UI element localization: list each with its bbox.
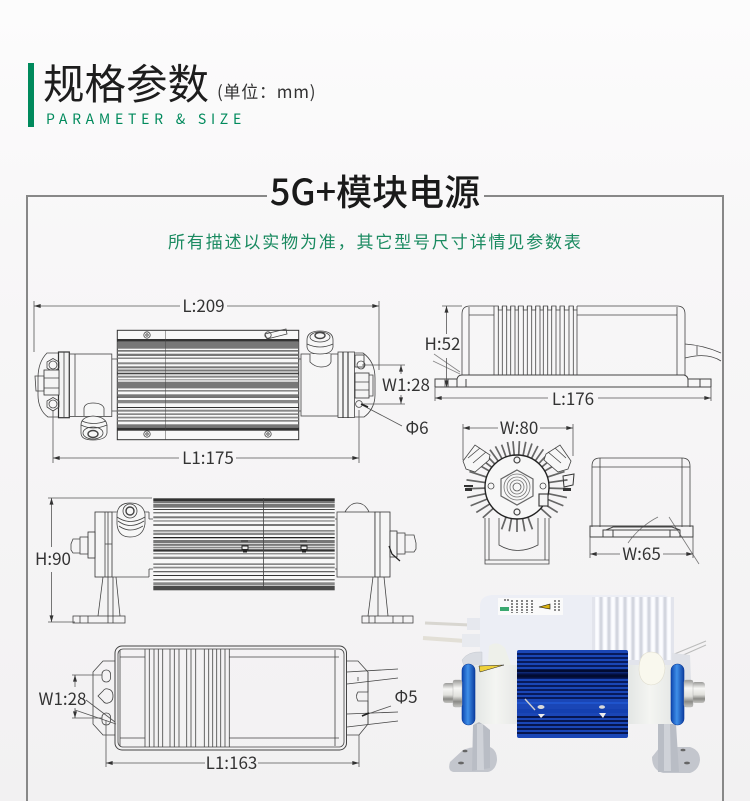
right translucent chamber <box>628 665 672 724</box>
left stand <box>449 722 497 772</box>
power supply housing <box>480 595 674 690</box>
panel heading: 5G+模块电源 <box>270 164 480 216</box>
english subtitle: PARAMETER & SIZE <box>46 109 246 129</box>
heat sink <box>117 329 299 440</box>
dimension: H 90: H:90 <box>35 545 71 570</box>
dimension: L 176 <box>435 385 711 410</box>
dimension: W 80 <box>463 414 573 460</box>
left water connector <box>81 403 107 440</box>
drawing: end view of tube <box>463 414 574 564</box>
dimension: H 52 <box>425 306 462 387</box>
panel note: 所有描述以实物为准，其它型号尺寸详情见参数表 <box>168 228 583 253</box>
right stand <box>652 724 700 773</box>
right metal nut <box>684 680 705 707</box>
right blue ring <box>671 664 684 725</box>
drawing: power supply end view <box>590 458 699 565</box>
left translucent chamber <box>474 665 517 724</box>
dimension: diameter 6 <box>361 404 429 439</box>
left flange mount hint <box>462 652 482 666</box>
power supply outline <box>590 458 699 564</box>
dimension: L1 163: L1:163 <box>206 749 257 774</box>
dimension: diameter 5: Φ5 <box>394 683 418 708</box>
dimension: L1 175 <box>53 410 359 469</box>
right end cap <box>299 331 375 418</box>
terminals <box>464 474 574 491</box>
radial heat sink fins <box>466 441 568 532</box>
dimension: L 209 <box>34 292 379 370</box>
dimension: L 209: L:209 <box>182 292 225 317</box>
mounting bracket <box>485 518 549 564</box>
left fitting <box>488 643 511 665</box>
dimension: L1 175: L1:175 <box>182 444 234 469</box>
dimension: diameter 5 <box>362 683 418 716</box>
heading: parameter section <box>28 51 316 129</box>
title: 规格参数 <box>43 51 209 111</box>
left end cap <box>35 352 117 418</box>
dimension: W1 28 <box>39 675 116 724</box>
dimension: W 80: W:80 <box>500 414 538 439</box>
right fitting <box>639 652 665 685</box>
drawing: power supply top view <box>39 646 418 774</box>
drawing: power supply side view <box>425 306 721 410</box>
dimension: L1 163 <box>106 720 359 774</box>
dimension: W 65: W:65 <box>622 540 661 565</box>
drawing: top view of ozone tube <box>34 292 430 469</box>
dimension: W1 28 <box>362 365 430 404</box>
angled water connectors <box>463 445 571 472</box>
central disc <box>485 455 549 519</box>
left end and stand <box>71 503 153 623</box>
drawing: side view of ozone tube <box>35 498 416 623</box>
power supply body <box>435 306 721 387</box>
product label <box>498 598 563 615</box>
housing <box>93 646 398 750</box>
dimension: W1 28: W1:28 <box>382 371 430 396</box>
dimension: H 90 <box>35 498 152 622</box>
blue heat sink <box>517 650 628 738</box>
panel frame <box>27 196 723 801</box>
unit note: (单位：mm) <box>217 78 316 103</box>
left metal nut <box>443 680 462 707</box>
dimension: diameter 6: Φ6 <box>405 414 429 439</box>
dimension: W1 28: W1:28 <box>39 685 86 710</box>
product photo <box>423 595 706 773</box>
right end and stand <box>335 503 416 623</box>
wires <box>423 618 706 660</box>
dimension: L 176: L:176 <box>552 385 594 410</box>
green accent bar <box>28 63 34 127</box>
left blue ring <box>462 664 475 725</box>
heat sink <box>153 498 335 590</box>
warning sticker <box>479 665 504 672</box>
dimension: H 52: H:52 <box>425 330 460 355</box>
